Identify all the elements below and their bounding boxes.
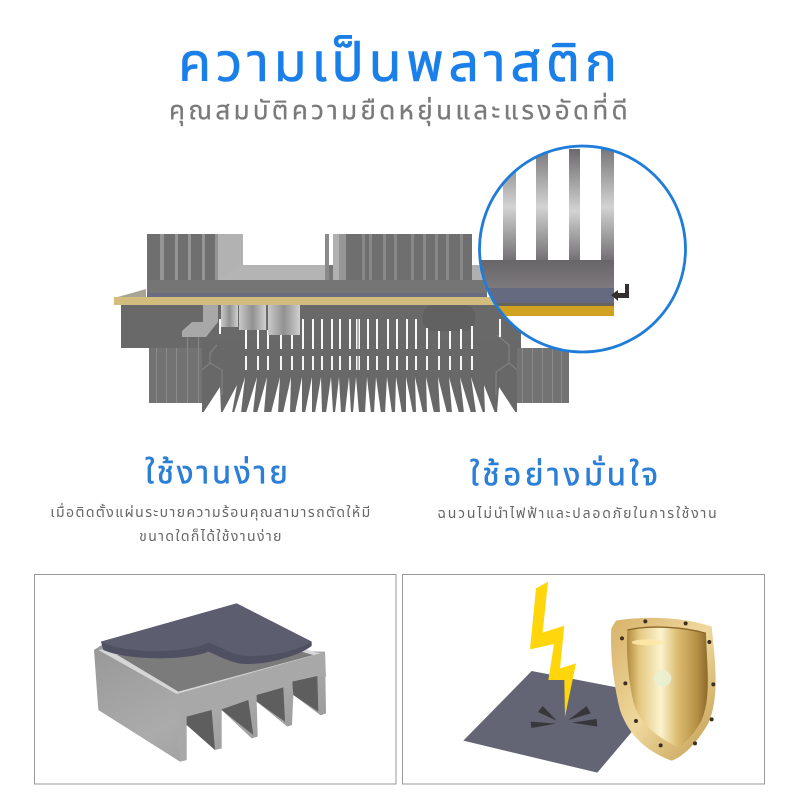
subtitle: คุณสมบัติความยืดหยุ่นและแรงอัดที่ดี [169,95,631,125]
shield rivets [620,619,715,747]
text: easy to use description [50,502,372,544]
heading: easy to use: ใช้งานง่าย [145,455,291,490]
text: safety description: ฉนวนไม่นำไฟฟ้าและปลอดภัยในการใช้งาน [437,505,719,521]
arrow marker [611,284,629,301]
sawtooth fin tips [203,377,516,413]
lower heat sink [121,305,569,412]
lightning bolt [530,582,576,717]
text: easy to use description: ขนาดใดก็ได้ใช้งานง่าย [139,528,283,544]
adhesive line [496,303,614,306]
lower side fin lines [156,335,562,403]
text: easy to use description: เมื่อติดตั้งแผ่นระบายความร้อนคุณสามารถตัดให้มี [50,504,372,520]
aluminium sink body [94,630,326,762]
impact marks [531,706,597,728]
white slits lower row [245,356,473,370]
magnified fins [503,140,614,262]
title: ความเป็นพลาสติก [178,33,622,93]
lens ring [480,146,686,352]
panel: insulation and safety [402,574,764,784]
gold shield [611,618,716,761]
heading: use with confidence: ใช้อย่างมั่นใจ [470,457,662,492]
panel: heat sink with pad [34,574,396,784]
magnified gold board [498,306,614,316]
white slits upper row [219,319,501,349]
board [114,289,494,305]
upper heat sink base [147,280,487,293]
magnifier circle [470,140,686,352]
heat sink assembly diagram [114,234,569,413]
thermal pad [147,293,487,297]
thermal pad [101,603,312,664]
magnified thermal pad [488,288,614,303]
upper heat sink center plate [218,265,326,280]
grey pad [463,671,633,773]
upper heat sink left block [147,234,243,281]
magnified base [482,260,614,288]
upper heat sink right block [325,234,484,281]
hexagonal fin outlines [202,335,517,395]
capacitors [182,305,300,337]
